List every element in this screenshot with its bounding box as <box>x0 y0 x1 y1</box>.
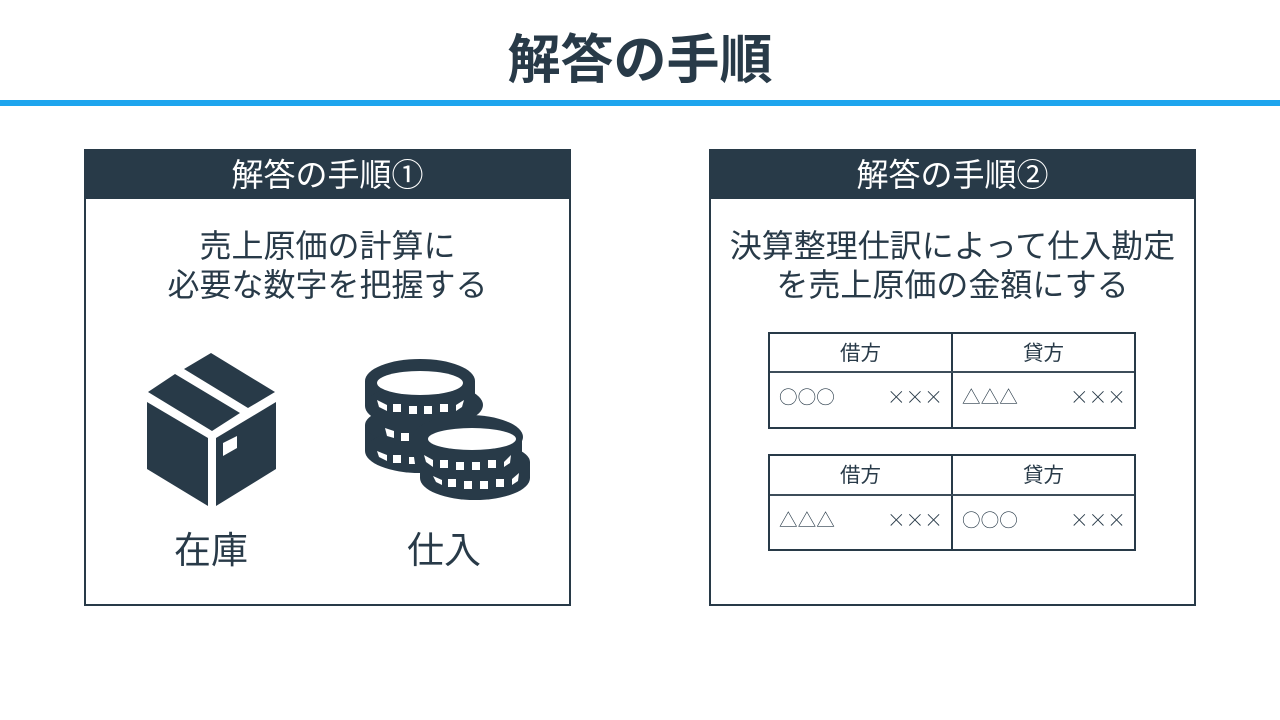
text: step 1 description: 売上原価の計算に <box>199 228 456 264</box>
panel: step 1 <box>84 149 571 606</box>
text: step 1 description <box>167 228 488 303</box>
debit account: △△△ <box>779 506 835 533</box>
text: step 2 description <box>730 228 1175 303</box>
text: step 2 description: を売上原価の金額にする <box>776 267 1129 303</box>
debit account: ○○○ <box>779 383 835 410</box>
credit header: 貸方 <box>1023 342 1064 365</box>
debit amount: ××× <box>887 506 943 533</box>
credit account: △△△ <box>962 383 1018 410</box>
debit amount: ××× <box>887 383 943 410</box>
credit amount: ××× <box>1070 383 1126 410</box>
table: journal entry 2 <box>768 454 1136 551</box>
title: 解答の手順 <box>508 31 772 90</box>
heading: step 1: 解答の手順① <box>231 157 424 193</box>
debit header: 借方 <box>840 464 881 487</box>
table: journal entry 1 <box>768 332 1136 429</box>
panel: step 2 <box>709 149 1196 606</box>
icon: coin stacks <box>365 359 530 500</box>
text: step 1 description: 必要な数字を把握する <box>167 267 488 303</box>
label: purchases: 仕入 <box>407 530 481 571</box>
title underline <box>0 100 1280 106</box>
heading: step 2: 解答の手順② <box>856 157 1048 193</box>
credit account: ○○○ <box>962 506 1018 533</box>
debit header: 借方 <box>840 342 881 365</box>
label: inventory: 在庫 <box>174 530 248 571</box>
heading: step 1 <box>84 149 571 199</box>
heading: step 2 <box>709 149 1196 199</box>
text: step 2 description: 決算整理仕訳によって仕入勘定 <box>730 228 1175 264</box>
credit header: 貸方 <box>1023 464 1064 487</box>
credit amount: ××× <box>1070 506 1126 533</box>
icon: cardboard box <box>147 353 276 506</box>
